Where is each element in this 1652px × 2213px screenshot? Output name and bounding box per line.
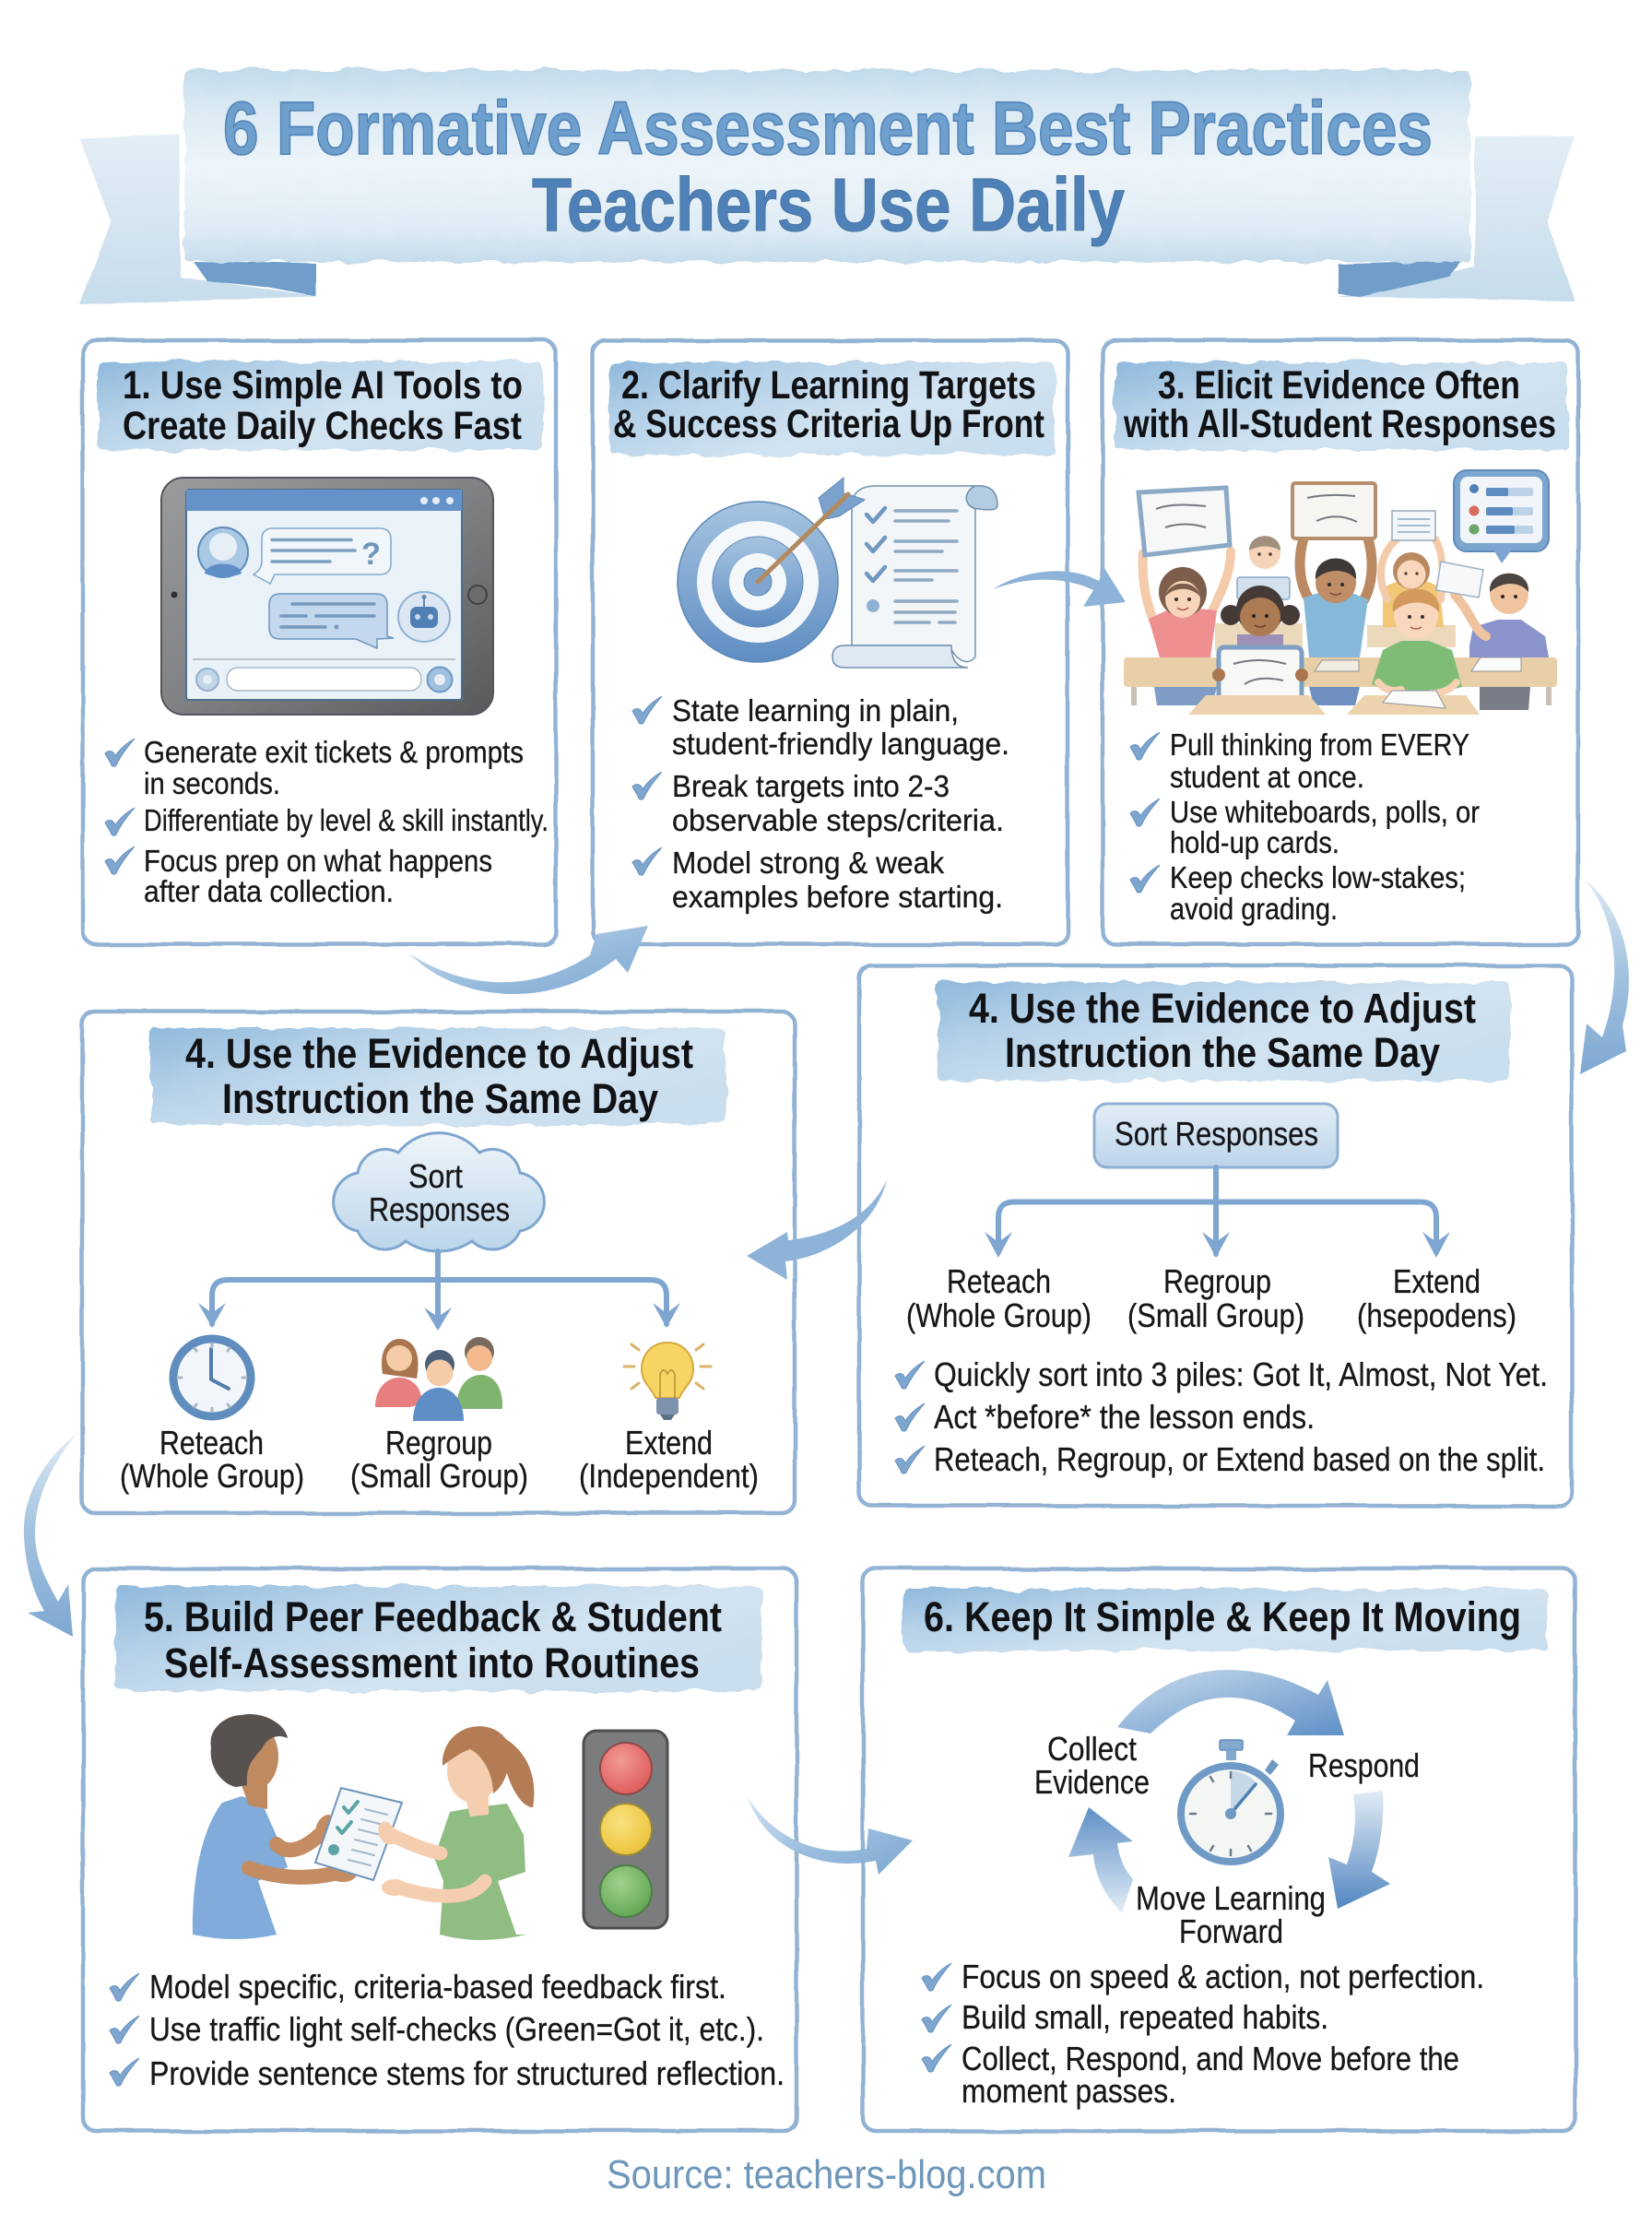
student purple	[1455, 574, 1549, 657]
heading: Self-Assessment into Routines	[164, 1639, 700, 1686]
panel 4 right: same-day adjust list	[859, 965, 1572, 1506]
illustration: peers exchanging checklist	[193, 1714, 534, 1940]
bullets	[105, 735, 549, 908]
bullets: student-friendly language.	[672, 727, 1009, 761]
main desk	[1124, 657, 1557, 710]
back desks	[1215, 623, 1303, 651]
cycle labels: Collect	[1047, 1730, 1137, 1768]
banner right tail	[1338, 136, 1575, 301]
tree labels: Reteach	[159, 1424, 264, 1462]
bullets: hold-up cards.	[1170, 825, 1339, 859]
arrow: collect to respond	[1117, 1670, 1344, 1735]
bullets: avoid grading.	[1170, 892, 1338, 926]
bullets: Model specific, criteria-based feedback first.	[149, 1968, 726, 2006]
tree labels: Extend	[625, 1424, 713, 1462]
heading: Create Daily Checks Fast	[123, 404, 522, 448]
icon: scroll checklist	[832, 486, 997, 668]
heading	[969, 985, 1476, 1076]
arrow: panel 3 to panel 4 right	[1580, 880, 1629, 1074]
banner left fold	[193, 261, 316, 297]
back girl	[1381, 511, 1444, 627]
tree labels: (Independent)	[579, 1457, 759, 1495]
panel frame	[859, 965, 1572, 1506]
front desks	[1188, 657, 1521, 715]
heading brush	[937, 982, 1510, 1081]
heading brush	[116, 1586, 761, 1691]
heading: with All-Student Responses	[1123, 402, 1556, 446]
bullets	[1130, 728, 1480, 926]
bullets: examples before starting.	[672, 880, 1003, 914]
bullets: Focus on speed & action, not perfection.	[962, 1958, 1484, 1995]
arrow: respond to move	[1328, 1791, 1390, 1909]
box: sort responses	[1094, 1104, 1338, 1167]
student girl with buns	[1221, 586, 1300, 653]
bullets: Break targets into 2-3	[672, 769, 950, 803]
paper held up	[1436, 562, 1483, 598]
arrow: panel 4 left to panel 5	[24, 1434, 77, 1637]
cycle labels: Respond	[1308, 1746, 1420, 1784]
tree labels: (Whole Group)	[906, 1296, 1092, 1334]
back boy	[1237, 536, 1290, 599]
tree labels: (hsepodens)	[1357, 1296, 1516, 1334]
heading: Instruction the Same Day	[1005, 1029, 1440, 1076]
boy	[193, 1714, 357, 1939]
panel frame	[863, 1568, 1575, 2131]
bullets	[895, 1355, 1548, 1478]
poll bubble	[1454, 470, 1549, 563]
bullets: Focus prep on what happens	[144, 844, 492, 878]
bullets: after data collection.	[144, 874, 394, 908]
main title: Teachers Use Daily	[532, 163, 1125, 247]
heading: 2. Clarify Learning Targets	[621, 363, 1036, 408]
heading brush	[903, 1589, 1547, 1651]
board center	[1292, 483, 1375, 538]
tree labels: Regroup	[1163, 1262, 1271, 1300]
heading: 6. Keep It Simple & Keep It Moving	[924, 1593, 1521, 1640]
heading: 5. Build Peer Feedback & Student	[144, 1593, 722, 1640]
cloud: sort responses	[334, 1133, 544, 1251]
panel 5: peer feedback	[83, 1568, 796, 2131]
banner main	[184, 70, 1469, 262]
panel 6: keep it simple	[863, 1568, 1575, 2131]
icon: three people	[375, 1337, 502, 1421]
branching arrows	[198, 1251, 680, 1331]
cycle labels: Evidence	[1034, 1763, 1150, 1801]
bullets: observable steps/criteria.	[672, 803, 1004, 837]
bullets: Provide sentence stems for structured reflection.	[149, 2054, 785, 2092]
bullets: student at once.	[1170, 760, 1364, 794]
heading: & Success Criteria Up Front	[613, 402, 1044, 446]
cycle diagram	[1034, 1670, 1420, 1950]
icon: clock	[173, 1339, 251, 1416]
panel frame	[83, 1568, 796, 2131]
bullets: Differentiate by level & skill instantly.	[144, 803, 549, 837]
cycle labels: Move Learning	[1136, 1879, 1326, 1917]
heading brush	[610, 362, 1055, 455]
illustration: classroom	[1124, 470, 1557, 715]
bullets: Build small, repeated habits.	[962, 1998, 1328, 2036]
bullets: Generate exit tickets & prompts	[144, 735, 524, 769]
heading: Instruction the Same Day	[222, 1075, 658, 1122]
panel 1: AI tools	[83, 340, 556, 944]
panel 3: all-student responses	[1103, 340, 1578, 944]
heading: 4. Use the Evidence to Adjust	[185, 1030, 693, 1077]
heading	[613, 363, 1044, 446]
tree labels: Reteach	[947, 1262, 1051, 1300]
icon: traffic light	[584, 1731, 667, 1928]
heading: 3. Elicit Evidence Often	[1158, 363, 1520, 408]
board left	[1139, 488, 1230, 555]
tree labels: Extend	[1393, 1262, 1481, 1300]
title banner	[79, 70, 1575, 304]
panel frame	[1103, 340, 1578, 944]
student pink	[1143, 551, 1231, 657]
tree labels: (Small Group)	[350, 1457, 528, 1495]
bullets: Use whiteboards, polls, or	[1170, 795, 1480, 829]
bullets: moment passes.	[962, 2072, 1176, 2110]
panel frame	[82, 1012, 795, 1513]
tree labels	[906, 1262, 1516, 1334]
main title: 6 Formative Assessment Best Practices	[223, 87, 1433, 171]
student blue	[1300, 538, 1372, 657]
bullets: Use traffic light self-checks (Green=Got it, etc.).	[149, 2010, 764, 2048]
cycle labels: Forward	[1179, 1912, 1283, 1950]
bullets	[110, 1968, 785, 2092]
heading: 1. Use Simple AI Tools to	[123, 363, 523, 408]
source line: Source: teachers-blog.com	[607, 2152, 1046, 2197]
tree labels	[120, 1424, 759, 1495]
bullets: Pull thinking from EVERY	[1170, 728, 1469, 762]
bullets: Model strong & weak	[672, 846, 944, 880]
cloud: sort responses: Responses	[369, 1190, 510, 1228]
heading brush	[1115, 362, 1568, 450]
student green	[1372, 588, 1462, 693]
arrow: panel 5 to panel 6	[748, 1797, 913, 1875]
arrow: panel 4 right to panel 4 left	[747, 1179, 887, 1280]
arrow: panel 2 to panel 3	[993, 568, 1126, 607]
main title	[223, 87, 1433, 247]
heading: 4. Use the Evidence to Adjust	[969, 985, 1476, 1032]
bullets: Keep checks low-stakes;	[1170, 860, 1466, 894]
heading	[123, 363, 523, 448]
arrow: move to collect	[1068, 1807, 1133, 1913]
heading brush	[98, 361, 542, 450]
panel 2: learning targets	[593, 340, 1068, 944]
heading	[1123, 363, 1556, 446]
bullets: Quickly sort into 3 piles: Got It, Almost, Not Yet.	[934, 1355, 1548, 1393]
icon: target with arrow	[678, 478, 865, 662]
bullets: Act *before* the lesson ends.	[934, 1398, 1315, 1436]
checklist paper	[315, 1788, 402, 1880]
tree labels: Regroup	[385, 1424, 492, 1462]
bullets: Reteach, Regroup, or Extend based on the split.	[934, 1440, 1545, 1478]
panel 4 left: same-day adjust tree	[82, 1012, 795, 1513]
icon: tablet chat	[161, 478, 493, 715]
tablet held	[1212, 647, 1308, 701]
bullets	[632, 693, 1009, 914]
box: sort responses: Sort Responses	[1115, 1115, 1318, 1153]
icon: tablet chat: ?	[361, 537, 381, 572]
bullets: in seconds.	[144, 766, 280, 800]
branching arrows	[985, 1167, 1450, 1258]
arrow: panel 1 to panel 2	[409, 926, 648, 994]
banner left tail	[79, 135, 316, 304]
heading	[144, 1593, 722, 1686]
tree labels: (Small Group)	[1127, 1296, 1304, 1334]
heading	[185, 1030, 693, 1122]
banner right fold	[1338, 260, 1464, 297]
panel frame	[593, 340, 1068, 944]
panel frame	[83, 340, 556, 944]
icon: light bulb	[624, 1343, 711, 1420]
bullets: State learning in plain,	[672, 693, 959, 728]
bullets: Collect, Respond, and Move before the	[962, 2040, 1459, 2077]
cycle labels	[1034, 1730, 1420, 1950]
girl	[374, 1726, 534, 1940]
cloud: sort responses: Sort	[408, 1157, 463, 1195]
heading brush	[151, 1028, 725, 1125]
tree labels: (Whole Group)	[120, 1457, 304, 1495]
bullets	[922, 1958, 1484, 2110]
icon: stopwatch	[1181, 1740, 1280, 1862]
